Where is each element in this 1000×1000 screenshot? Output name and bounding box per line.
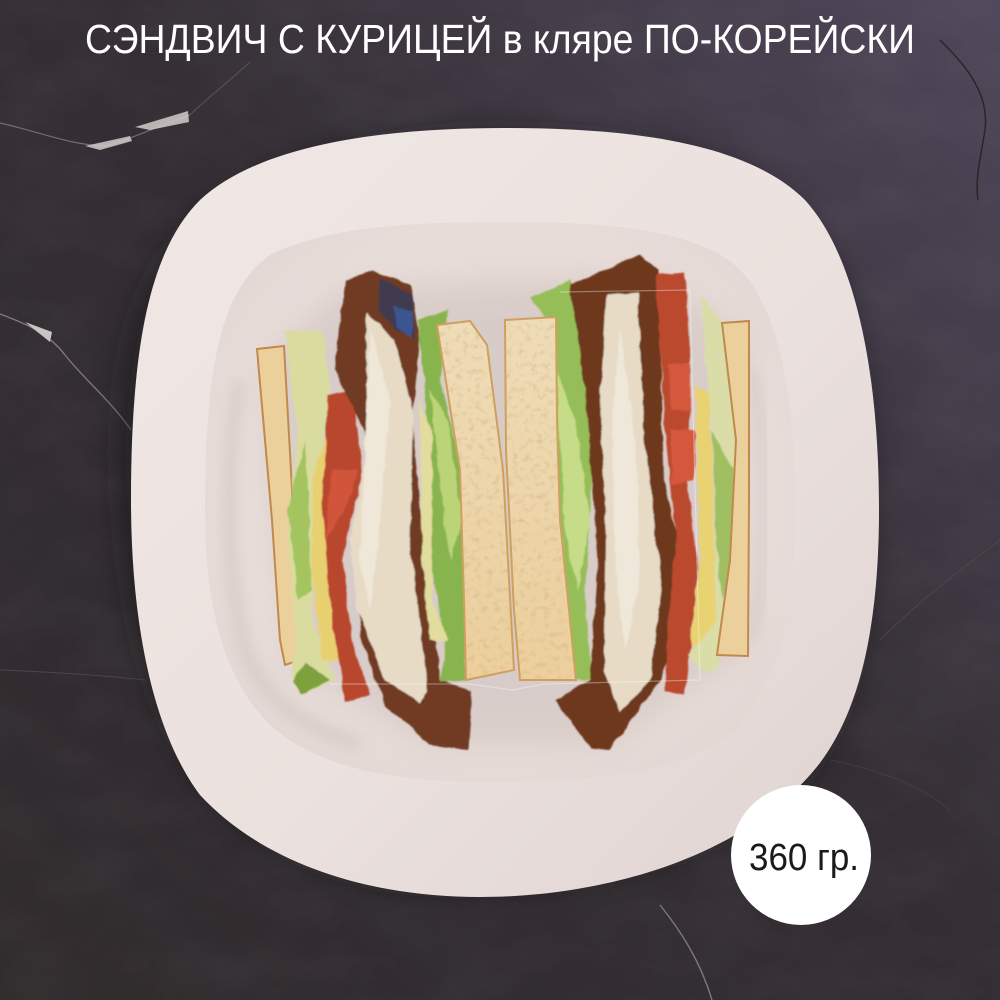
right lettuce inner — [530, 280, 595, 680]
left chicken meat — [350, 312, 428, 703]
plate — [131, 128, 879, 897]
right chicken crust — [555, 255, 690, 750]
sandwich shadow — [265, 275, 745, 745]
right outer bread — [717, 321, 749, 656]
left lettuce outer — [284, 330, 335, 695]
left cheese and tomato — [312, 420, 338, 660]
sandwich: left half — [284, 270, 472, 750]
weight badge: 360 гр. — [749, 837, 859, 879]
plastic wrap — [330, 290, 700, 690]
right inner bread — [505, 317, 576, 680]
left outer bread — [257, 346, 315, 665]
right tomato — [655, 272, 698, 695]
right chicken meat — [600, 292, 662, 712]
title: СЭНДВИЧ С КУРИЦЕЙ в кляре ПО-КОРЕЙСКИ — [85, 16, 915, 62]
weight badge — [731, 785, 871, 925]
sandwich: right half — [530, 255, 738, 750]
left lettuce inner — [418, 310, 468, 682]
plate well — [205, 222, 795, 782]
left inner bread — [437, 321, 514, 680]
right cheese — [690, 385, 716, 650]
plate shadow — [117, 130, 870, 889]
left chicken crust — [335, 270, 472, 750]
right lettuce outer — [688, 295, 738, 672]
